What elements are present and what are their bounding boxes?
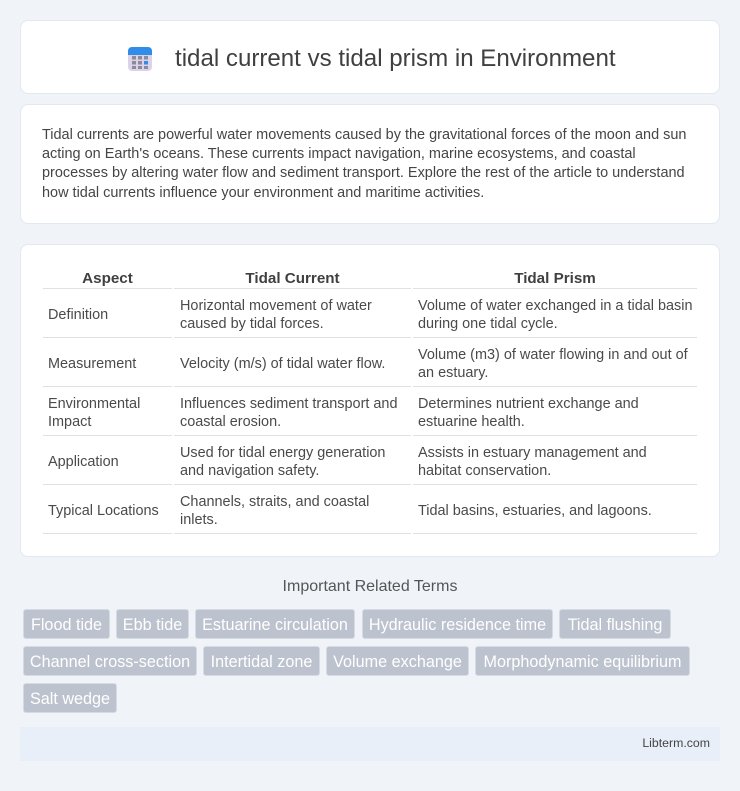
related terms tags: Salt wedge (30, 690, 110, 708)
related terms tags: Channel cross-section (30, 653, 190, 671)
comparison table: an estuary. (418, 365, 488, 381)
comparison table: Velocity (m/s) of tidal water flow. (180, 356, 385, 372)
related terms tags (23, 609, 690, 713)
title: tidal current vs tidal prism in Environment (175, 45, 616, 72)
row: application (48, 445, 647, 479)
comparison table: Volume of water exchanged in a tidal basin (418, 298, 692, 314)
table panel (20, 244, 720, 557)
header: tidal prism: Tidal Prism (514, 270, 596, 287)
text: processes by altering water flow and sediment transport. Explore the rest of the article to understand (42, 165, 685, 181)
comparison table: habitat conservation. (418, 463, 551, 479)
footer credit: Libterm.com (642, 736, 710, 750)
related terms tags: Intertidal zone (211, 653, 312, 671)
related terms tags: Morphodynamic equilibrium (484, 653, 681, 671)
related terms tags: Estuarine circulation (202, 616, 348, 634)
related terms tags: Flood tide (31, 616, 102, 634)
header: aspect: Aspect (82, 270, 133, 287)
comparison table: Environmental (48, 396, 140, 412)
intro panel (20, 104, 720, 224)
related terms tags: Volume exchange (333, 653, 462, 671)
icon: calendar (128, 47, 152, 71)
comparison table: Tidal basins, estuaries, and lagoons. (418, 503, 652, 519)
intro text (42, 127, 686, 201)
row: typical locations (48, 494, 652, 528)
text: how tidal currents influence your environment and maritime activities. (42, 185, 484, 201)
comparison table: inlets. (180, 512, 218, 528)
comparison table: Determines nutrient exchange and (418, 396, 639, 412)
related terms tags: Tidal flushing (568, 616, 662, 634)
comparison table: during one tidal cycle. (418, 316, 558, 332)
title card (20, 20, 720, 94)
comparison table: Application (48, 454, 119, 470)
comparison table: Definition (48, 307, 108, 323)
comparison table: caused by tidal forces. (180, 316, 324, 332)
comparison table: Influences sediment transport and (180, 396, 398, 412)
related terms tags: Ebb tide (123, 616, 182, 634)
row: environmental impact (48, 396, 639, 430)
comparison table: Assists in estuary management and (418, 445, 647, 461)
comparison table: Used for tidal energy generation (180, 445, 385, 461)
row: measurement (48, 347, 688, 381)
comparison table: Measurement (48, 356, 136, 372)
text: acting on Earth's oceans. These currents impact navigation, marine ecosystems, and coastal (42, 146, 636, 162)
row: definition (48, 298, 692, 332)
footer bar (20, 727, 720, 761)
comparison table: Channels, straits, and coastal (180, 494, 369, 510)
comparison table: Volume (m3) of water flowing in and out of (418, 347, 688, 363)
comparison table: and navigation safety. (180, 463, 319, 479)
comparison table (43, 270, 697, 534)
text: Tidal currents are powerful water movements caused by the gravitational forces of the moon and sun (42, 127, 686, 143)
related terms heading: Important Related Terms (283, 578, 457, 595)
comparison table: Typical Locations (48, 503, 159, 519)
comparison table: Impact (48, 414, 91, 430)
comparison table: estuarine health. (418, 414, 525, 430)
header: tidal current: Tidal Current (245, 270, 340, 287)
comparison table: coastal erosion. (180, 414, 281, 430)
comparison table: Horizontal movement of water (180, 298, 372, 314)
related terms tags: Hydraulic residence time (369, 616, 546, 634)
